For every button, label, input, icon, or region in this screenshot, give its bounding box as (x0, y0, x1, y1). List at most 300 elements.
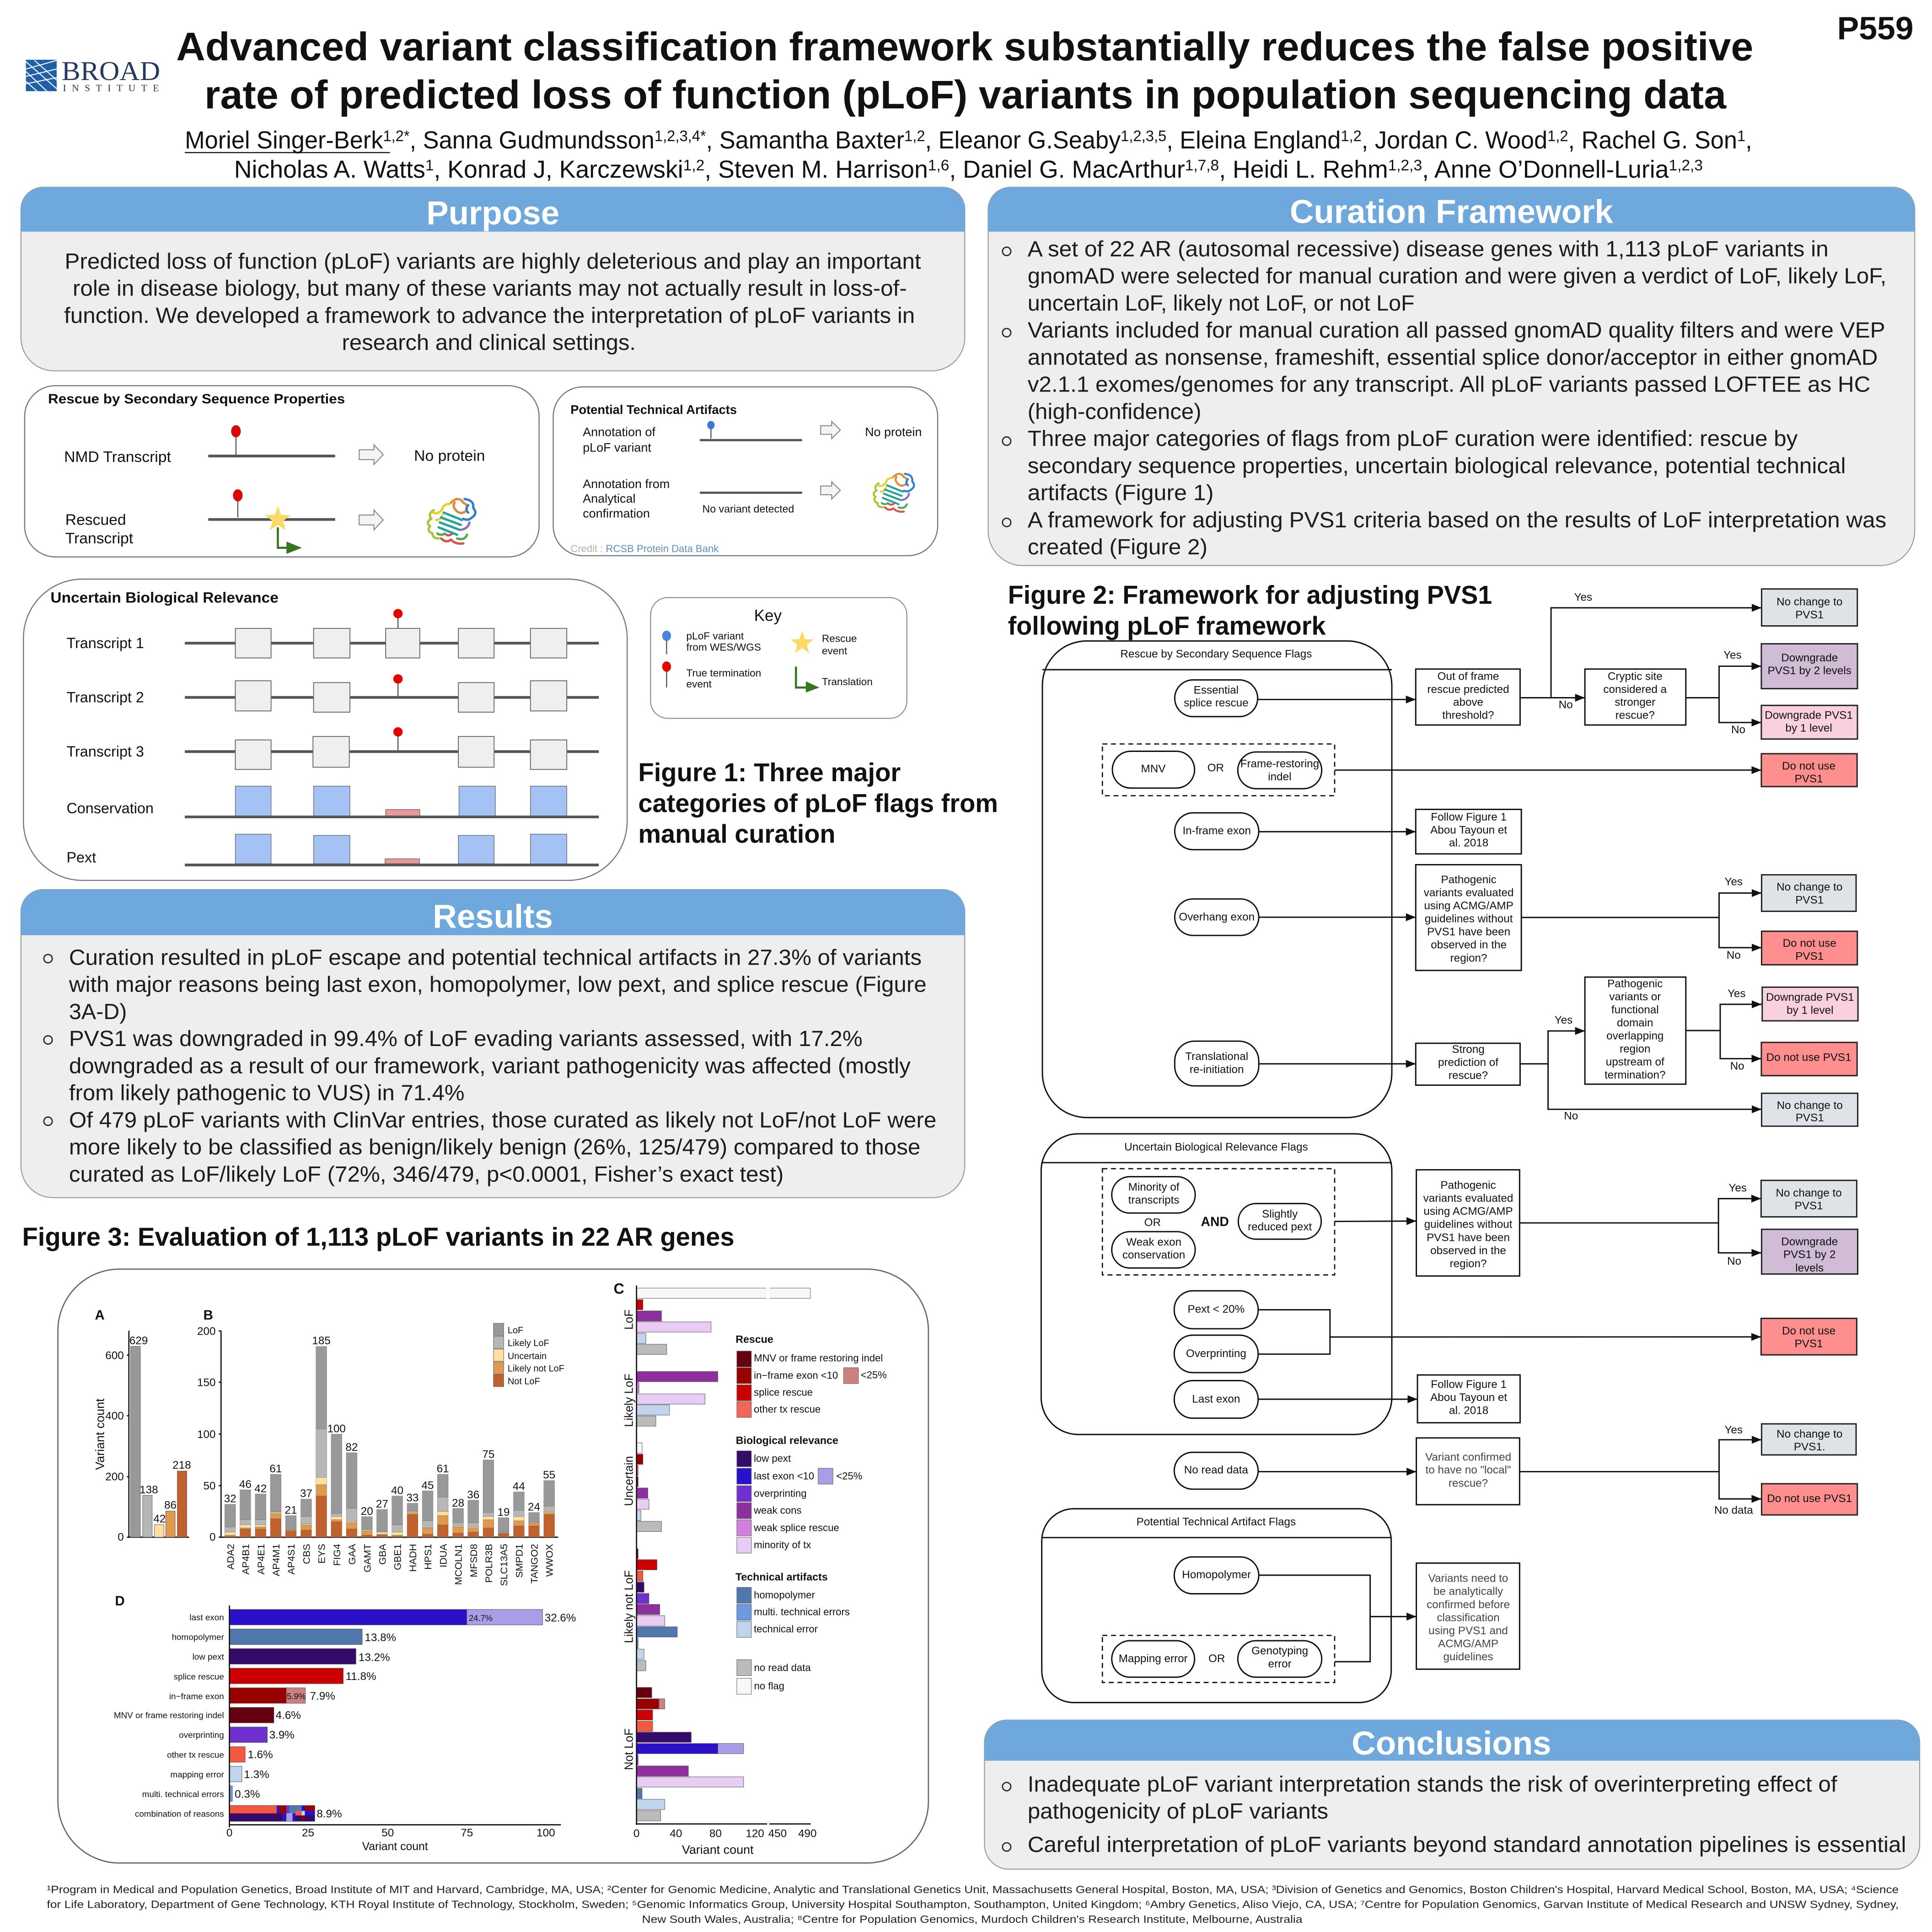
text: purpose body: research and clinical settings. (342, 330, 636, 355)
authors: Moriel Singer-Berk (185, 127, 389, 154)
chart D: reasons for LoF evasion: multi. technical errors (142, 1789, 224, 1799)
box: follow figure 1: Follow Figure 1 (1431, 1378, 1507, 1390)
panel: curation framework (988, 187, 1915, 565)
combination of reasons stacked bar (230, 1805, 315, 1821)
node: essential splice rescue: splice rescue (1184, 697, 1249, 709)
legend: key: pLoF variant (686, 630, 744, 642)
flowchart: rescue decision boxes and arrows: Yes (1725, 876, 1743, 888)
track: pext (66, 834, 599, 866)
outcome: downgrade by 2 levels: PVS1 by 2 levels (1768, 665, 1852, 677)
heading: Rescue by Secondary Sequence Properties (48, 392, 345, 407)
flowchart: rescue decision boxes and arrows (1258, 589, 1858, 1126)
node: translational re-initiation: Translational (1185, 1051, 1248, 1063)
outcome: no change to PVS1: PVS1 (1795, 1200, 1823, 1212)
authors (185, 127, 1752, 183)
outcome: no change to PVS1 (1761, 875, 1856, 911)
track: conservation (66, 786, 599, 817)
chart A: variant count by verdict: Variant count (93, 1398, 107, 1470)
flowchart: rescue decision boxes and arrows: No (1730, 1060, 1744, 1072)
chart B: variants per gene: SMPD1 (513, 1544, 525, 1578)
chart B: variants per gene: 37 (300, 1487, 312, 1500)
track: transcript 3: Transcript 3 (66, 743, 144, 760)
chart B: variants per gene: 33 (406, 1492, 419, 1504)
chart D: reasons for LoF evasion: in−frame exon (169, 1691, 224, 1701)
flowchart: rescue decision boxes and arrows: No (1731, 724, 1745, 736)
legend: biological relevance: weak splice rescue (753, 1522, 839, 1534)
chart B: variants per gene: AP4M1 (270, 1544, 282, 1576)
chart D: reasons for LoF evasion: 50 (381, 1827, 394, 1839)
legend: technical artifacts (735, 1571, 850, 1637)
chart B: variants per gene: 185 (312, 1335, 331, 1347)
box: variant confirmed: Variant confirmed (1425, 1451, 1511, 1464)
authors: 1,2,3,4* (655, 128, 706, 145)
group: mapping OR genotyping error: Genotyping (1251, 1645, 1308, 1657)
chart B: variants per gene: AP4E1 (255, 1544, 267, 1575)
authors: 1,2,3 (1669, 157, 1703, 174)
node: essential splice rescue (1175, 680, 1258, 717)
group: mapping OR genotyping error: Mapping error (1119, 1653, 1188, 1665)
flowchart: lower decision boxes and arrows (1258, 1170, 1858, 1669)
group: MNV or frame-restoring indel: Frame-restoring (1240, 758, 1319, 770)
outcome: no change to PVS1: PVS1. (1794, 1441, 1825, 1453)
authors: 1,2 (904, 128, 925, 145)
box: out of frame rescue: threshold? (1442, 709, 1494, 721)
chart D: reasons for LoF evasion: 0 (226, 1827, 232, 1839)
group: minority / weak AND slightly reduced pext: Slightly (1262, 1208, 1298, 1220)
authors: , Eleina England (1166, 127, 1341, 154)
chart D: reasons for LoF evasion: 3.9% (269, 1729, 295, 1741)
chart C: flag counts by verdict: Likely not LoF (623, 1570, 635, 1643)
row: rescued transcript: Rescued (65, 512, 126, 529)
text: results bullets: more likely to be classified as benign/likely benign (26%, 125/479) compared to those (69, 1135, 920, 1159)
figure 1 caption: Figure 1: Three major (638, 758, 901, 787)
outcome: no change to PVS1: No change to (1776, 881, 1842, 893)
box: pathogenic variants or functional domain: domain (1617, 1017, 1653, 1029)
box: pathogenic variants or functional domain: Pathogenic (1607, 977, 1663, 990)
row: annotation from analytical confirmation: Analytical (583, 492, 635, 505)
legend: verdict (494, 1323, 564, 1387)
authors: 1,2 (1341, 128, 1362, 145)
chart D: reasons for LoF evasion: low pext (193, 1652, 224, 1662)
outcome: no change to PVS1 (1761, 1093, 1858, 1126)
box: follow figure 1: Abou Tayoun et (1430, 1391, 1507, 1404)
text: curation bullets (1003, 236, 1886, 559)
chart B: variants per gene: 55 (543, 1469, 555, 1481)
chart B: variants per gene: GBE1 (392, 1544, 403, 1570)
legend: biological relevance (736, 1434, 862, 1553)
box: pathogenic variants evaluated: variants evaluated (1423, 1192, 1513, 1205)
box: out of frame rescue: Out of frame (1438, 670, 1499, 682)
chart D: reasons for LoF evasion: 1.3% (244, 1768, 269, 1781)
authors: , Sanna Gudmundsson (410, 127, 655, 154)
chart B: variants per gene: 36 (467, 1489, 479, 1501)
box: pathogenic variants evaluated: variants evaluated (1424, 887, 1513, 899)
flowchart: lower decision boxes and arrows: No data (1714, 1504, 1753, 1516)
legend: key: Rescue (822, 633, 857, 644)
group: mapping OR genotyping error: error (1268, 1658, 1292, 1670)
chart C: flag counts by verdict: Not LoF (623, 1728, 635, 1770)
chart A: variant count by verdict: 629 (129, 1335, 148, 1347)
chart B: variants per gene: 46 (239, 1478, 252, 1491)
node: no read data: No read data (1184, 1464, 1248, 1476)
figure 2 caption: Figure 2: Framework for adjusting PVS1 (1008, 580, 1492, 609)
box: out of frame rescue: rescue predicted (1427, 683, 1509, 696)
legend: rescue: in−frame exon <10 (754, 1369, 838, 1381)
outcome: no change to PVS1: No change to (1776, 1428, 1842, 1440)
chart B: variants per gene: 40 (391, 1485, 403, 1497)
chart A: variant count by verdict: 42 (153, 1513, 166, 1525)
node: translational re-initiation (1175, 1041, 1259, 1086)
chart B: variants per gene: GAMT (361, 1544, 373, 1572)
flowchart: rescue decision boxes and arrows: Yes (1723, 649, 1742, 661)
box: pathogenic variants evaluated (1416, 865, 1521, 971)
legend: rescue: Rescue (735, 1333, 773, 1345)
chart B: variants per gene: 100 (197, 1428, 215, 1441)
outcome: do not use PVS1 (1761, 1484, 1857, 1515)
chart C: flag counts by verdict: C (614, 1281, 624, 1297)
node: pext below 20%: Pext < 20% (1188, 1303, 1245, 1315)
outcome: no change to PVS1: No change to (1776, 1187, 1842, 1199)
box: pathogenic variants evaluated: guidelines without (1424, 1218, 1513, 1231)
text: results bullets: curated as LoF/likely LoF (72%, 346/479, p<0.0001, Fisher’s exact test) (69, 1162, 784, 1186)
authors: 1,6 (928, 157, 949, 174)
flowchart: rescue by secondary sequence flags (1042, 641, 1392, 1117)
node: translational re-initiation: re-initiation (1190, 1063, 1244, 1076)
legend: verdict: Likely not LoF (508, 1363, 564, 1374)
authors: , Daniel G. MacArthur (949, 156, 1185, 183)
box: follow figure 1: al. 2018 (1449, 1404, 1488, 1417)
chart B: variants per gene: 0 (209, 1531, 215, 1544)
text: results bullets (44, 945, 936, 1186)
track: transcript 1: Transcript 1 (66, 635, 144, 651)
row: annotation from analytical confirmation (583, 474, 914, 520)
authors: , (1745, 127, 1752, 154)
chart B: variants per gene: 20 (361, 1505, 373, 1518)
box: variants need to be analytically confirmed: confirmed before (1427, 1599, 1510, 1611)
chart C: flag counts by verdict: 450 (768, 1828, 787, 1840)
chart C: flag counts by verdict: 120 (746, 1828, 764, 1840)
chart D: reasons for LoF evasion: 100 (537, 1827, 555, 1839)
box: variants need to be analytically confirmed: ACMG/AMP (1438, 1637, 1498, 1650)
legend: technical artifacts: multi. technical errors (754, 1606, 850, 1618)
heading: results: Results (433, 898, 553, 935)
group: minority / weak AND slightly reduced pext: Weak exon (1126, 1236, 1181, 1249)
outcome: do not use PVS1: Do not use (1782, 760, 1835, 772)
box: pathogenic variants or functional domain: variants or (1609, 991, 1661, 1003)
outcome: downgrade by 2 levels (1761, 1229, 1858, 1274)
flowchart: uncertain biological relevance flags (1041, 1134, 1392, 1434)
legend: biological relevance: low pext (754, 1453, 791, 1464)
panel: uncertain biological relevance (23, 579, 627, 880)
text: purpose body: function. We developed a framework to advance the interpretation of pLoF variants in (64, 303, 915, 328)
chart C: flag counts by verdict: Variant count (682, 1843, 754, 1857)
outcome: downgrade by 1 level: by 1 level (1787, 1004, 1834, 1017)
outcome: do not use PVS1: PVS1 (1795, 773, 1823, 785)
legend: biological relevance: last exon <10 (754, 1470, 814, 1481)
box: pathogenic variants evaluated: using ACMG/AMP (1424, 900, 1513, 912)
legend: rescue: splice rescue (754, 1387, 813, 1398)
heading: conclusions: Conclusions (1352, 1725, 1551, 1762)
flowchart: potential technical artifact flags: Potential Technical Artifact Flags (1137, 1516, 1296, 1528)
group: minority / weak AND slightly reduced pext: reduced pext (1248, 1221, 1312, 1233)
node: essential splice rescue: Essential (1194, 684, 1239, 696)
flowchart: rescue decision boxes and arrows: No (1727, 949, 1741, 961)
box: strong prediction of rescue: rescue? (1449, 1069, 1488, 1082)
box: pathogenic variants evaluated: region? (1450, 1257, 1487, 1270)
text: conclusions bullets (1003, 1772, 1906, 1857)
chart A: variant count by verdict: 400 (105, 1410, 124, 1422)
legend: biological relevance: overprinting (754, 1487, 806, 1499)
box: pathogenic variants or functional domain: functional (1611, 1004, 1659, 1016)
node: homopolymer (1174, 1557, 1259, 1594)
box: pathogenic variants or functional domain: overlapping (1606, 1030, 1664, 1042)
group: uncertain bars (637, 1443, 661, 1531)
chart C: flag counts by verdict: Likely LoF (623, 1374, 635, 1427)
chart B: variants per gene: 61 (269, 1463, 282, 1475)
authors: Nicholas A. Watts (234, 156, 426, 183)
flowchart: rescue by secondary sequence flags: Rescue by Secondary Sequence Flags (1120, 648, 1312, 660)
logo: Broad Institute: INSTITUTE (63, 82, 159, 93)
track: transcript 2 (66, 674, 599, 712)
chart C: flag counts by verdict: LoF (623, 1309, 635, 1330)
box: pathogenic variants evaluated: Pathogenic (1441, 874, 1497, 886)
chart B: variants per gene: MCOLN1 (453, 1544, 464, 1585)
box: follow figure 1: Abou Tayoun et (1430, 824, 1507, 836)
outcome: downgrade by 2 levels: Downgrade (1781, 1236, 1838, 1248)
row: rescued transcript: Transcript (65, 530, 134, 547)
chart B: variants per gene: 75 (482, 1449, 494, 1461)
chart B: variants per gene: 61 (437, 1463, 449, 1475)
row: annotation from analytical confirmation: Annotation from (583, 477, 670, 491)
outcome: do not use PVS1: PVS1 (1795, 950, 1824, 963)
chart D: reasons for LoF evasion: 11.8% (346, 1670, 376, 1683)
box: variant confirmed (1417, 1438, 1519, 1505)
legend: no data: no read data (754, 1662, 811, 1674)
text: curation bullets: Three major categories of flags from pLoF curation were identified: rescue by (1028, 426, 1798, 451)
box: follow figure 1: al. 2018 (1449, 837, 1488, 849)
group: minority / weak AND slightly reduced pext: transcripts (1128, 1194, 1179, 1206)
figure 1 caption: categories of pLoF flags from (638, 789, 998, 817)
authors: , Rachel G. Son (1568, 127, 1737, 154)
authors: , Anne O’Donnell-Luria (1422, 156, 1669, 183)
track: transcript 3 (66, 727, 599, 769)
row: NMD transcript: No protein (414, 448, 485, 465)
chart D: reasons for LoF evasion: 13.2% (359, 1651, 390, 1664)
legend: rescue (735, 1333, 887, 1417)
legend: verdict: LoF (508, 1326, 523, 1336)
chart A: variant count by verdict: 0 (118, 1531, 124, 1544)
legend: key: True termination (686, 667, 761, 679)
chart B: variants per gene: 42 (254, 1482, 267, 1495)
box: pathogenic variants evaluated: Pathogenic (1440, 1179, 1496, 1191)
chart D: reasons for LoF evasion: 4.6% (276, 1709, 301, 1722)
outcome: do not use PVS1 (1761, 931, 1857, 965)
heading: curation framework: Curation Framework (1290, 193, 1614, 231)
flowchart: rescue decision boxes and arrows: Yes (1728, 987, 1746, 1000)
node: in-frame exon (1175, 813, 1259, 850)
chart B: variants per gene: GAA (346, 1544, 358, 1565)
box: variants need to be analytically confirmed: be analytically (1433, 1585, 1503, 1598)
chart B: variants per gene: MFSD8 (468, 1544, 479, 1577)
legend: no data (737, 1660, 811, 1694)
figure 2 caption (1008, 580, 1492, 640)
footnote: affiliations: ¹Program in Medical and Population Genetics, Broad Institute of MIT and Harvard, Cambridge, MA, USA; ²Center for Genomic Medicine, Analytic and Translational Genetics Unit, Massachusetts General Hospital, Boston, MA, USA; ³Division of Genetics and Genomics, Boston Children's Hospital, Harvard Medical School, Boston, MA, USA; ⁴Science (47, 1884, 1899, 1895)
box: variant confirmed: rescue? (1449, 1477, 1488, 1490)
chart C: flag counts by verdict: 80 (709, 1828, 722, 1840)
chart D: reasons for LoF evasion: 13.8% (365, 1631, 396, 1644)
node: overprinting: Overprinting (1186, 1347, 1246, 1360)
outcome: downgrade by 1 level: Downgrade PVS1 (1766, 991, 1854, 1004)
panel: figure 3 charts (58, 1269, 928, 1863)
heading: purpose: Purpose (426, 194, 559, 231)
box: out of frame rescue: above (1453, 696, 1483, 708)
chart A: variant count by verdict (93, 1308, 191, 1544)
flowchart: potential technical artifact flags (1042, 1509, 1391, 1702)
track: pext: Pext (66, 849, 96, 866)
chart D: reasons for LoF evasion: combination of reasons (135, 1809, 224, 1819)
authors: 1 (425, 157, 434, 174)
footnote: affiliations: for Life Laboratory, Department of Gene Technology, KTH Royal Institute of Technology, Stockholm, Sweden; ⁵Genomic Informatics Group, University Hospital Southampton, Southampton, United Kingdom; ⁶Ambry Genetics, Aliso Viejo, CA, USA; ⁷Centre for Population Genomics, Garvan Institute of Medical Research and UNSW Sydney, Sydney, (47, 1898, 1899, 1910)
figure 2 caption: following pLoF framework (1008, 611, 1326, 640)
legend: technical artifacts: technical error (754, 1623, 818, 1635)
flowchart: lower decision boxes and arrows: No (1727, 1255, 1741, 1267)
chart B: variants per gene: 100 (327, 1422, 346, 1435)
chart B: variants per gene (197, 1308, 564, 1586)
box: cryptic site: stronger (1615, 696, 1655, 708)
chart B: variants per gene: AP4S1 (285, 1544, 297, 1575)
row: NMD transcript: NMD Transcript (64, 449, 171, 466)
outcome: do not use PVS1: Do not use (1783, 937, 1836, 950)
chart B: variants per gene: 19 (498, 1506, 510, 1519)
box: variant confirmed: to have no "local" (1426, 1464, 1511, 1476)
authors: 1,2 (683, 157, 704, 174)
flowchart: rescue decision boxes and arrows: No (1559, 698, 1573, 711)
chart B: variants per gene: FIG4 (331, 1544, 343, 1566)
box: pathogenic variants or functional domain (1585, 977, 1686, 1084)
outcome: do not use PVS1: Do not use (1782, 1325, 1835, 1337)
authors: 1,2,3,5 (1121, 128, 1166, 145)
text: curation bullets: uncertain LoF, likely not LoF, or not LoF (1028, 291, 1415, 316)
legend: key: Key (754, 607, 782, 625)
authors: , Eleanor G.Seaby (925, 127, 1121, 154)
legend: technical artifacts: homopolymer (754, 1589, 815, 1600)
node: overprinting (1174, 1335, 1258, 1373)
chart D: reasons for LoF evasion: overprinting (179, 1730, 224, 1740)
flowchart: lower decision boxes and arrows: Yes (1725, 1424, 1743, 1436)
group: minority / weak AND slightly reduced pext: Minority of (1128, 1181, 1180, 1193)
chart D: reasons for LoF evasion (114, 1594, 576, 1853)
node: no read data (1174, 1452, 1258, 1489)
text: conclusions bullets: Careful interpretation of pLoF variants beyond standard annotation pipelines is essential (1028, 1832, 1906, 1857)
legend: biological relevance: Biological relevance (736, 1434, 838, 1446)
chart B: variants per gene: POLR3B (483, 1544, 494, 1583)
credit: Credit : RCSB Protein Data Bank (570, 543, 719, 554)
chart B: variants per gene: SLC13A5 (498, 1544, 510, 1586)
group: MNV or frame-restoring indel (1102, 744, 1335, 796)
node: homopolymer: Homopolymer (1182, 1569, 1251, 1581)
chart D: reasons for LoF evasion: other tx rescue (167, 1750, 224, 1760)
chart C: flag counts by verdict: 490 (798, 1828, 817, 1840)
box: variants need to be analytically confirmed: Variants need to (1428, 1572, 1508, 1585)
box: cryptic site: considered a (1603, 683, 1667, 696)
legend: key: event (822, 645, 848, 656)
flowchart: rescue decision boxes and arrows: No (1564, 1110, 1578, 1122)
text: curation bullets: gnomAD were selected for manual curation and were given a verdict of LoF, likely LoF, (1028, 264, 1886, 289)
row: annotation of pLoF variant: Annotation of (583, 425, 655, 439)
chart B: variants per gene: 200 (197, 1325, 215, 1337)
group: minority / weak AND slightly reduced pext: AND (1201, 1214, 1229, 1229)
chart A: variant count by verdict: 86 (164, 1499, 177, 1512)
panel: potential technical artifacts (553, 387, 938, 556)
chart B: variants per gene: HADH (407, 1544, 419, 1572)
row: annotation from analytical confirmation: No variant detected (703, 503, 794, 515)
chart B: variants per gene: 45 (422, 1479, 434, 1492)
title (176, 24, 1753, 117)
outcome: no change to PVS1 (1761, 1424, 1856, 1455)
box: pathogenic variants or functional domain: upstream of (1606, 1056, 1664, 1068)
text: results bullets: 3A-D) (69, 999, 127, 1024)
chart B: variants per gene: WWOX (544, 1544, 555, 1577)
box: pathogenic variants or functional domain: termination? (1605, 1069, 1665, 1081)
chart B: variants per gene: HPS1 (422, 1544, 434, 1570)
outcome: no change to PVS1: PVS1 (1796, 1111, 1824, 1124)
chart D: reasons for LoF evasion: MNV or frame restoring indel (114, 1711, 224, 1720)
row: annotation of pLoF variant: pLoF variant (583, 440, 651, 454)
text: curation bullets: created (Figure 2) (1028, 535, 1208, 559)
chart B: variants per gene: EYS (316, 1544, 327, 1564)
outcome: downgrade by 2 levels: PVS1 by 2 (1783, 1249, 1835, 1261)
node: pext below 20% (1174, 1291, 1258, 1329)
group: minority / weak AND slightly reduced pext: OR (1144, 1216, 1161, 1229)
outcome: downgrade by 1 level: by 1 level (1785, 722, 1832, 735)
outcome: do not use PVS1 (1761, 1318, 1857, 1355)
legend: rescue: other tx rescue (754, 1403, 821, 1415)
text: conclusions bullets: pathogenicity of pLoF variants (1028, 1799, 1328, 1824)
chart C: flag counts by verdict: 0 (633, 1828, 639, 1840)
authors: , Heidi L. Rehm (1219, 156, 1388, 183)
chart B: variants per gene: CBS (301, 1544, 312, 1564)
outcome: downgrade by 2 levels: levels (1795, 1262, 1824, 1274)
authors: 1,2,3 (1388, 157, 1422, 174)
row: rescued transcript (65, 489, 475, 554)
outcome: no change to PVS1 (1761, 1181, 1857, 1217)
title: Advanced variant classification framework substantially reduces the false positive (176, 24, 1753, 69)
authors: 1,7,8 (1185, 157, 1219, 174)
group: MNV or frame-restoring indel: MNV (1141, 763, 1166, 775)
legend: biological relevance: weak cons (753, 1505, 801, 1516)
chart C: flag counts by verdict: 40 (670, 1828, 682, 1840)
text: results bullets: downgraded as a result of our framework, variant pathogenicity was affected (mostly (69, 1053, 911, 1078)
chart D: reasons for LoF evasion: D (115, 1594, 125, 1609)
box: variants need to be analytically confirmed: guidelines (1443, 1651, 1493, 1663)
group: not LoF bars (637, 1687, 744, 1821)
group: minority / weak AND slightly reduced pext (1102, 1169, 1335, 1275)
outcome: do not use PVS1: Do not use PVS1 (1767, 1492, 1852, 1505)
chart B: variants per gene: 21 (285, 1504, 297, 1516)
group: MNV or frame-restoring indel: indel (1268, 771, 1291, 783)
flowchart: rescue decision boxes and arrows: Yes (1555, 1014, 1572, 1026)
text: curation bullets: Variants included for manual curation all passed gnomAD quality filters and were VEP (1028, 318, 1885, 343)
text: results bullets: Curation resulted in pLoF escape and potential technical artifacts in 27.3% of variants (69, 945, 922, 970)
row: NMD transcript (64, 425, 485, 466)
flowchart: uncertain biological relevance flags: Uncertain Biological Relevance Flags (1124, 1141, 1308, 1153)
legend: key: Translation (822, 676, 873, 687)
chart D: reasons for LoF evasion: 8.9% (317, 1808, 342, 1820)
legend: rescue: <25% (861, 1369, 887, 1381)
chart C: flag counts by verdict (614, 1281, 887, 1857)
row: annotation of pLoF variant (583, 421, 922, 454)
chart B: variants per gene: 28 (452, 1497, 464, 1509)
